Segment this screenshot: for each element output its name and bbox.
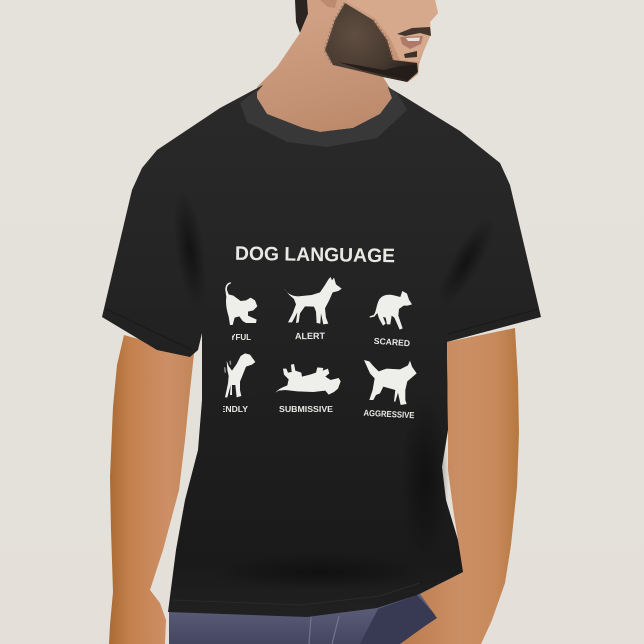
dog panel: friendly bbox=[223, 353, 256, 412]
right arm and hand bbox=[400, 328, 519, 644]
label: AGGRESSIVE bbox=[363, 408, 415, 420]
right sleeve hem bbox=[448, 309, 538, 334]
ear bbox=[320, 0, 337, 8]
left sleeve hem bbox=[106, 309, 192, 350]
label: SUBMISSIVE bbox=[279, 404, 333, 414]
icon: submissive dog bbox=[275, 364, 341, 395]
label: ALERT bbox=[295, 331, 326, 341]
neck and face bbox=[257, 0, 438, 132]
hair bbox=[295, 0, 308, 33]
icon: alert dog bbox=[284, 277, 342, 324]
belt loop bbox=[309, 616, 339, 644]
dog panel: alert bbox=[284, 277, 342, 341]
collar ribbing bbox=[240, 85, 407, 147]
label: FRIENDLY bbox=[206, 404, 248, 414]
product photo: man wearing dog language t-shirt bbox=[102, 0, 541, 644]
dog panel: aggressive bbox=[363, 360, 417, 420]
shirt body and sleeves bbox=[102, 85, 541, 617]
printed graphic: dog language bbox=[223, 246, 417, 418]
dog panel: submissive bbox=[275, 364, 341, 414]
t-shirt bbox=[102, 85, 541, 617]
dog panel: scared bbox=[370, 291, 412, 348]
dog panel: playful bbox=[225, 282, 258, 340]
icon: friendly dog bbox=[225, 353, 255, 397]
icon: aggressive dog bbox=[364, 360, 417, 405]
moustache bbox=[397, 27, 431, 36]
mouth bbox=[400, 36, 423, 58]
motion marks bbox=[225, 361, 231, 373]
skin bbox=[257, 0, 438, 132]
icon: scared dog bbox=[370, 291, 412, 330]
title: DOG LANGUAGE bbox=[235, 243, 395, 267]
beard bbox=[325, 3, 418, 82]
jeans bbox=[169, 585, 450, 644]
face highlight bbox=[345, 0, 438, 62]
label: SCARED bbox=[373, 336, 410, 348]
bottom hem bbox=[172, 583, 420, 605]
fold shading bbox=[168, 189, 503, 590]
left arm bbox=[109, 335, 194, 644]
label: PLAYFUL bbox=[215, 333, 251, 342]
icon: playful dog bbox=[225, 282, 257, 325]
